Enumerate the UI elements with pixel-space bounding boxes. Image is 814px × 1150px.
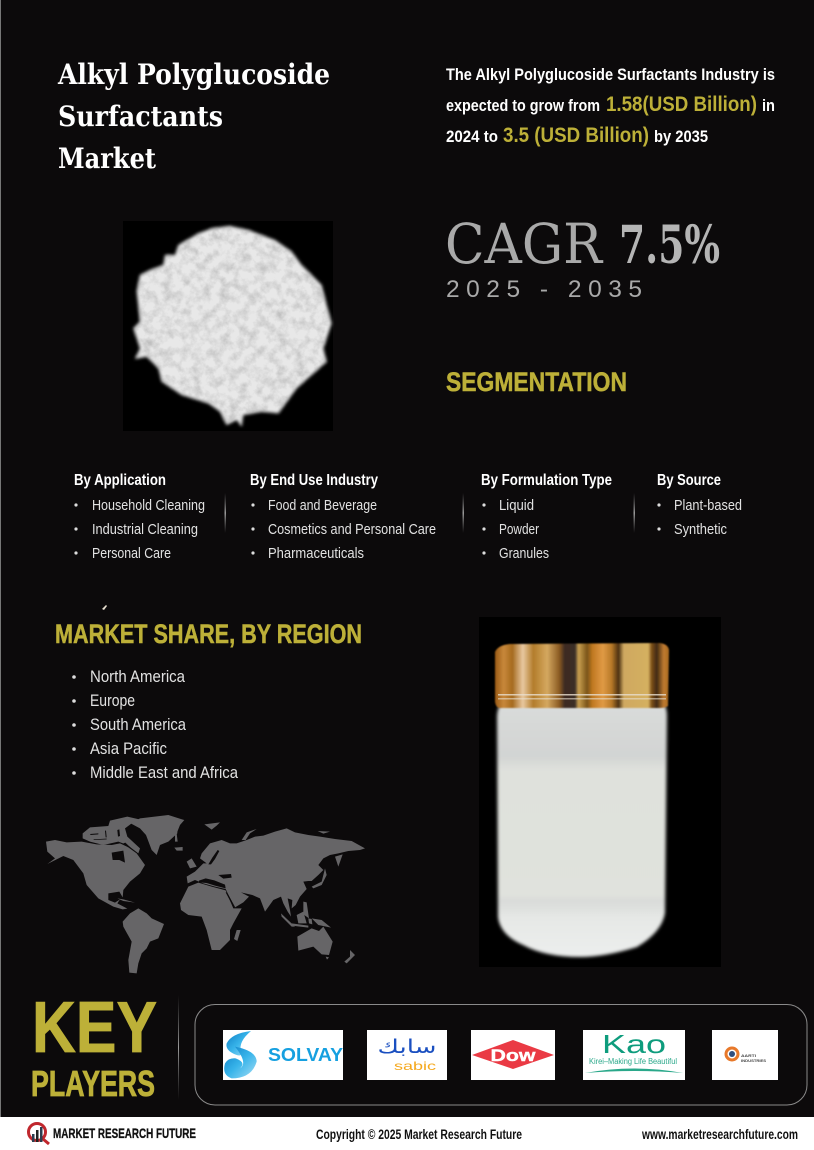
eurasia, africa and oceania — [175, 819, 365, 963]
column: by formulation type: Liquid — [499, 497, 534, 514]
column: by end use industry: Cosmetics and Personal Care — [268, 521, 436, 538]
region list: South America — [90, 715, 186, 734]
logo: solvay: SOLVAY — [268, 1045, 343, 1065]
column: by end use industry — [250, 472, 436, 562]
logo: aarti industries: AARTI — [741, 1053, 756, 1058]
column: by source: Synthetic — [674, 521, 727, 538]
column: by application: Personal Care — [92, 545, 171, 562]
title: Market — [58, 142, 156, 175]
CAGR: 2025 - 2035 — [446, 276, 642, 303]
column: by formulation type: By Formulation Type — [481, 472, 612, 489]
heading: key players: KEY — [32, 988, 157, 1068]
logo: kao: Kao — [602, 1029, 666, 1059]
heading: segmentation: SEGMENTATION — [446, 367, 627, 397]
growth summary text: 2024 to — [446, 128, 498, 146]
growth summary text — [446, 66, 775, 147]
heading: key players: PLAYERS — [31, 1063, 155, 1104]
title — [57, 58, 330, 175]
region list: North America — [90, 667, 185, 686]
image: white powder — [123, 221, 333, 431]
footer — [0, 1117, 814, 1150]
growth summary text: The Alkyl Polyglucoside Surfactants Industry is — [446, 66, 775, 84]
growth summary text: in — [762, 97, 775, 115]
region list: Europe — [90, 691, 135, 710]
logo: sabic: سابك — [378, 1036, 436, 1058]
CAGR: 7.5% — [619, 215, 720, 276]
growth summary text: expected to grow from — [446, 97, 600, 115]
column: by formulation type — [481, 472, 612, 562]
americas and greenland — [46, 815, 184, 973]
icon: market research future magnifier — [28, 1124, 49, 1144]
column: by application: By Application — [74, 472, 166, 489]
logo: dow: Dow — [490, 1046, 536, 1065]
column: by application: Household Cleaning — [92, 497, 205, 514]
image: white liquid jar with gold cap — [479, 617, 721, 967]
column: by formulation type: Powder — [499, 521, 539, 538]
column: by end use industry: Food and Beverage — [268, 497, 377, 514]
column: by end use industry: Pharmaceuticals — [268, 545, 364, 562]
column: by source — [657, 472, 742, 538]
growth summary text: by 2035 — [654, 128, 708, 146]
logo: sabic — [367, 1030, 447, 1080]
logo: kao — [583, 1029, 685, 1080]
region list — [72, 667, 238, 782]
logo: aarti industries — [712, 1030, 778, 1080]
panel: company logos — [195, 1004, 807, 1105]
heading: market share by region: MARKET SHARE, BY REGION — [55, 619, 362, 649]
logo: solvay — [223, 1030, 343, 1080]
logo: sabic: sabic — [394, 1059, 436, 1073]
region list: Asia Pacific — [90, 739, 167, 758]
CAGR — [445, 212, 720, 303]
column: by application: Industrial Cleaning — [92, 521, 198, 538]
footer: MARKET RESEARCH FUTURE — [53, 1125, 196, 1141]
growth summary text: 1.58(USD Billion) — [606, 93, 757, 116]
heading: key players — [31, 988, 157, 1104]
column: by application — [74, 472, 205, 562]
footer: Copyright © 2025 Market Research Future — [316, 1127, 522, 1142]
CAGR: CAGR — [445, 212, 603, 276]
logo: dow — [471, 1030, 555, 1080]
title: Alkyl Polyglucoside — [57, 58, 330, 91]
growth summary text: 3.5 (USD Billion) — [503, 124, 649, 147]
logo: kao: Kirei–Making Life Beautiful — [589, 1057, 677, 1066]
world map — [46, 815, 365, 973]
column: by source: By Source — [657, 472, 721, 489]
title: Surfactants — [58, 100, 223, 133]
column: by source: Plant-based — [674, 497, 742, 514]
region list: Middle East and Africa — [90, 763, 238, 782]
logo: aarti industries: INDUSTRIES — [741, 1058, 766, 1063]
column: by formulation type: Granules — [499, 545, 549, 562]
segmentation columns — [74, 472, 742, 562]
column: by end use industry: By End Use Industry — [250, 472, 378, 489]
